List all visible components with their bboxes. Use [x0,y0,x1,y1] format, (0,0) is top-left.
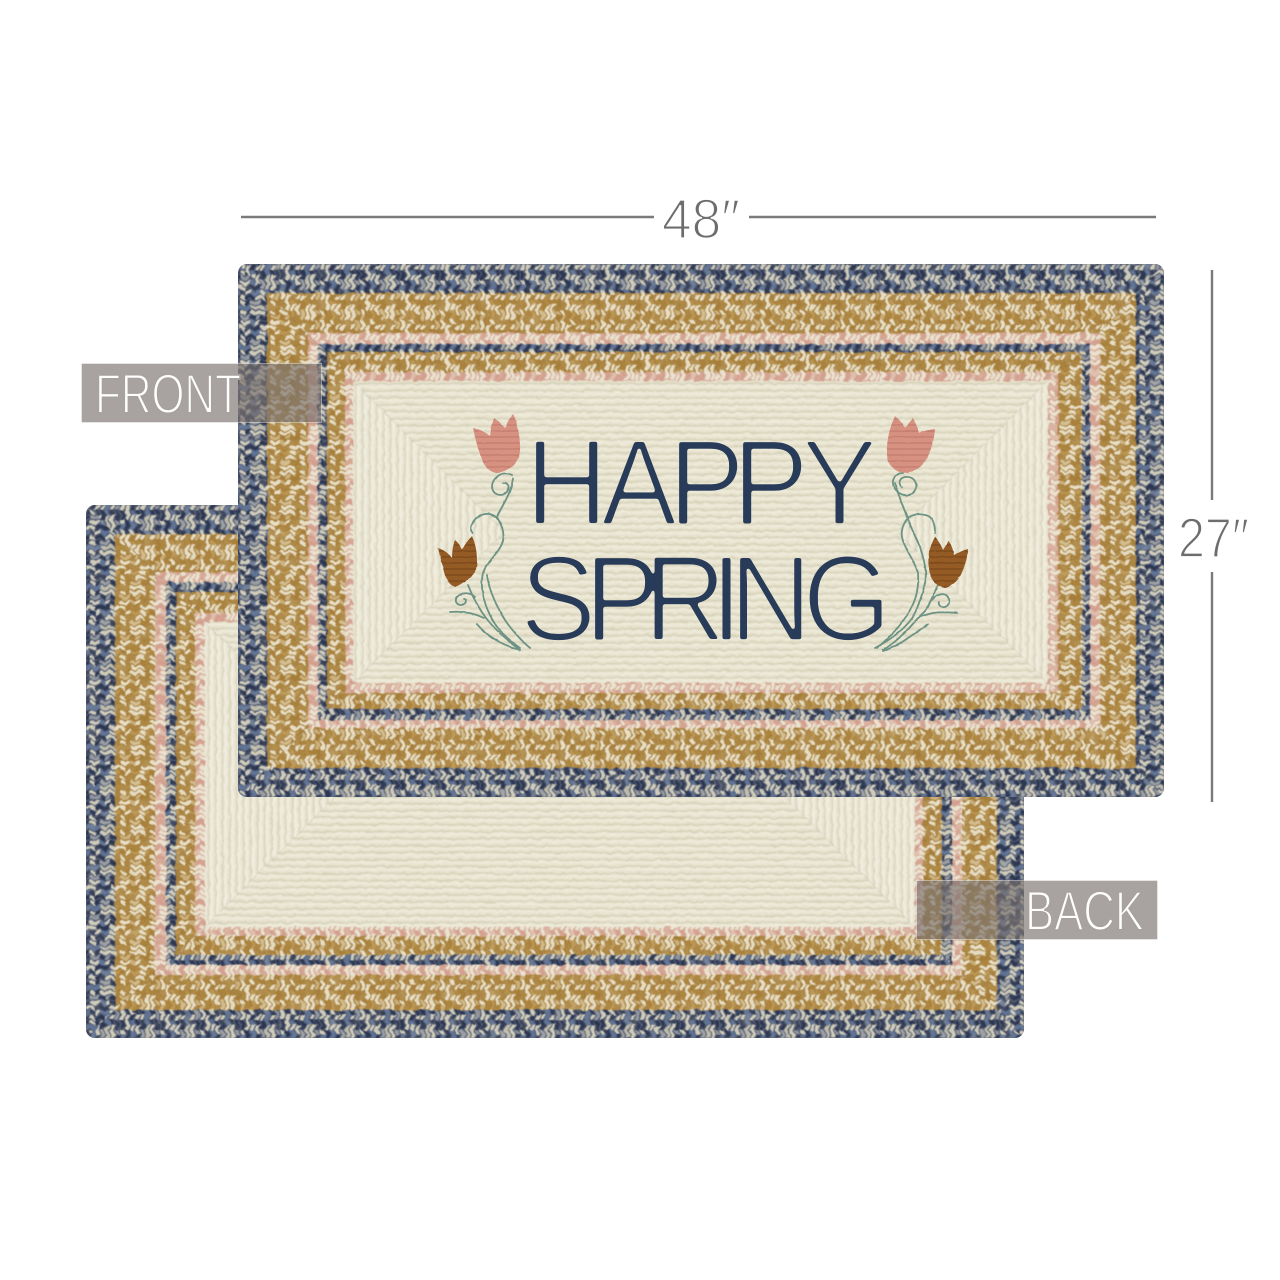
label: back: BACK [1025,879,1144,942]
rug lettering: HAPPY: HAPPY [526,415,878,551]
front rug: thin blue band [318,344,1090,720]
front rug: wide tan band [267,293,1136,768]
back rug: outer blue band [86,505,1024,1038]
back rug: pink band [155,572,962,975]
front rug: inner pink band [345,372,1058,693]
right stems [875,473,957,651]
label: back [916,879,1158,942]
front rug: outer blue band [238,264,1164,797]
back rug: inner pink band [195,613,923,936]
front rug [238,264,1164,797]
rug lettering: SPRING: SPRING [520,531,891,667]
label: front: FRONT [95,362,241,425]
front rug: cream center [353,381,1048,683]
right flowers [875,416,968,651]
back rug: inner tan band [176,592,942,955]
right pink tulip [887,416,935,473]
left pink tulip [473,414,520,473]
left brown tulip [438,536,477,587]
left stems [450,473,530,650]
height line [1211,270,1213,802]
back rug: thin blue band [166,582,952,965]
height label: 27″ [1178,506,1249,569]
front rug: inner tan band [327,352,1082,709]
back rug: wide tan band [115,534,997,1010]
back rug [86,505,1024,1038]
front rug: pink band [308,333,1100,728]
width label: 48″ [662,187,740,250]
left flowers [438,414,530,650]
width line [241,216,1156,218]
back rug: cream center [205,622,915,927]
right brown tulip [928,537,968,588]
